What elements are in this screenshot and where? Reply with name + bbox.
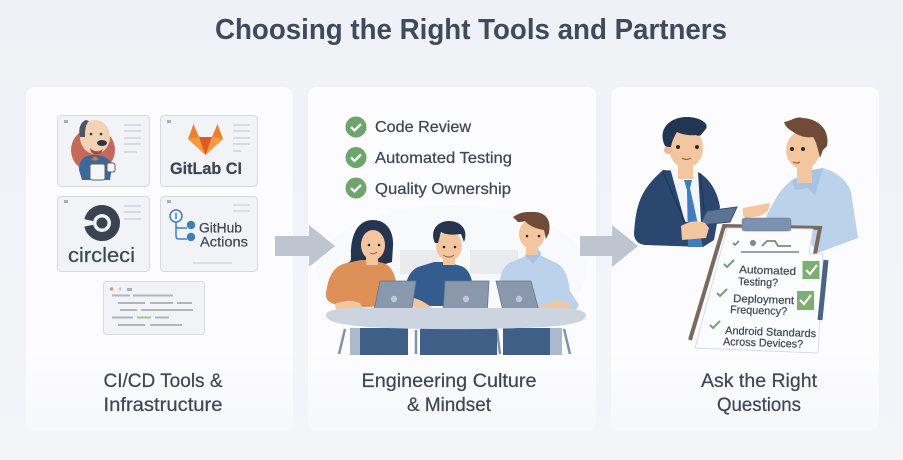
card: code window [104, 282, 204, 334]
item: Automated Testing: Automated Testing [375, 150, 512, 167]
arrow: culture to questions [580, 225, 638, 267]
label: Engineering Culture & Mindset: Engineering Culture [362, 371, 536, 392]
card: Jenkins [58, 116, 150, 186]
checklist item: Android Standards: Across Devices? [723, 336, 803, 351]
checklist item: Deployment Frequency [717, 289, 814, 318]
item: Code Review [346, 116, 471, 138]
arrow: tools to culture [275, 225, 335, 267]
checklist item: Android Standards: Android Standards [725, 325, 817, 340]
item: Automated Testing [346, 147, 512, 168]
person: man in light blue shirt [499, 212, 579, 313]
item: Quality Ownership [346, 178, 511, 198]
icon: CircleCI logo [86, 207, 118, 239]
label: Ask the Right Questions: Ask the Right [701, 371, 818, 392]
label: CI/CD Tools & Infrastructure [104, 371, 223, 416]
label: Ask the Right Questions [701, 371, 818, 416]
card: CircleCI: circleci [68, 245, 135, 267]
card: GitLab CI [160, 116, 258, 186]
illustration: man in light blue shirt [743, 117, 858, 253]
label: CI/CD Tools & Infrastructure: Infrastructure [104, 395, 222, 416]
icon: GitLab fox [188, 124, 223, 155]
person: woman in orange [326, 220, 397, 311]
item: Quality Ownership: Quality Ownership [375, 181, 511, 198]
card: GitLab CI: GitLab CI [170, 159, 242, 178]
card: GitHub Actions [160, 196, 258, 272]
panel: ask the right questions [611, 87, 879, 430]
checklist item: Automated Testing [724, 260, 820, 289]
card: GitHub Actions: GitHub [199, 220, 242, 236]
illustration: man in suit [634, 117, 737, 247]
card: GitHub Actions: Actions [200, 234, 248, 250]
checklist item: Deployment Frequency: Frequency? [730, 304, 787, 318]
checklist item: Android Standards [710, 321, 817, 351]
label: Engineering Culture & Mindset: & Mindset [407, 395, 492, 416]
item: Code Review: Code Review [375, 119, 471, 136]
icon: GitHub Actions workflow [170, 210, 194, 240]
illustration: team at table [317, 205, 587, 355]
checklist [346, 116, 512, 198]
person: man in navy [403, 221, 473, 311]
card: CircleCI [58, 196, 150, 272]
panel: CI/CD tools and infrastructure [26, 87, 293, 430]
illustration: clipboard checklist [690, 218, 826, 353]
laptops [373, 281, 540, 315]
label: Engineering Culture & Mindset [362, 371, 536, 416]
panel: engineering culture and mindset [308, 87, 596, 430]
label: CI/CD Tools & Infrastructure: CI/CD Tools & [104, 371, 223, 392]
title: Choosing the Right Tools and Partners [215, 14, 727, 46]
checklist item: Deployment Frequency: Deployment [733, 293, 794, 307]
label: Ask the Right Questions: Questions [717, 395, 801, 416]
checklist item: Automated Testing: Automated [739, 264, 796, 278]
table [326, 308, 586, 355]
checklist item: Automated Testing: Testing? [738, 276, 778, 289]
